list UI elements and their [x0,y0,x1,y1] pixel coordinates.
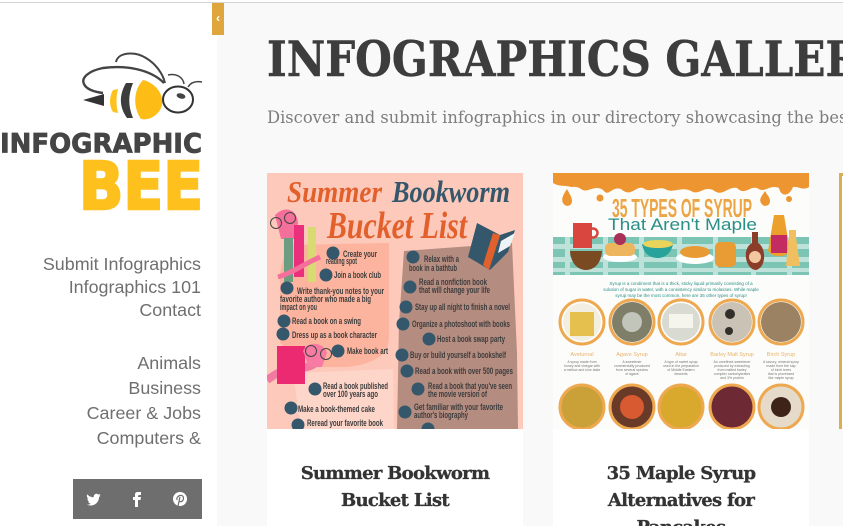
list item text: author's biography [414,410,468,420]
sidebar toggle tab: ‹ [216,11,220,25]
syrup labels: Agave Syrup [616,352,648,358]
list item text: Reread your favorite book [307,418,384,428]
infographic: syrup thumbnail: A savory, mineral syrup [763,360,799,364]
nav: categories: Animals [137,353,201,373]
infographic: syrup thumbnail: and 3% protein [720,376,744,380]
infographic: bookworm thumbnail: Bucket List [326,205,468,247]
list item text: over 100 years ago [323,389,378,399]
list item text: reading spot [326,256,357,266]
list item text: Write thank-you notes to your [297,286,384,296]
list item text: Dress up as a book character [292,330,377,340]
icon: twitter [87,494,100,506]
infographic: syrup thumbnail: used in the preparation [663,364,699,368]
card title [607,463,756,526]
sidebar [0,0,217,526]
logo: Infographic Bee [0,52,203,217]
infographic: syrup thumbnail: desserts [674,372,688,376]
infographic: syrup thumbnail: A type of sweet syrup [664,360,698,364]
infographic: syrup thumbnail [553,173,809,429]
bookshelf and worm [275,209,298,239]
list item text: Read a book published [323,381,388,391]
intro text [603,281,759,298]
intro text: solution of sugar in water, with a consistency similar to molasses. While maple [603,287,759,292]
top border [0,0,843,3]
nav: primary links: Infographics 101 [69,277,201,297]
nav: primary links [43,254,201,320]
nav: categories: Career & Jobs [87,403,201,423]
card: partial third [839,173,843,429]
card: Summer Bookworm Bucket List [267,173,523,526]
infographic: syrup thumbnail: A sweetener [622,360,642,364]
infographic: syrup thumbnail: from several species [616,368,648,372]
social icons bar [73,479,202,519]
icon: facebook [133,492,141,507]
syrup photo circles row 2 [560,385,803,429]
card title [301,463,490,511]
icon: bee [83,53,202,119]
syrup labels [570,352,795,358]
list item text: book in a bathtub [409,263,457,273]
list item text: Make a book-themed cake [298,404,375,414]
list item text: impact on you [280,302,317,312]
syrup labels: Barley Malt Syrup [710,352,754,358]
infographic: syrup thumbnail: A syrup made from [567,360,597,364]
nav: categories [87,353,201,448]
nav: categories: Computers & [97,428,201,448]
page subtitle: Discover and submit infographics in our directory showcasing the best [267,108,843,128]
heading: Summer [287,174,383,209]
infographic: syrup thumbnail: of birch trees [771,368,791,372]
list item text: Create your [343,249,377,259]
icon: pinterest [173,492,187,506]
infographic: syrup thumbnail: made from the sap [766,364,796,368]
nav: categories: Business [128,378,201,398]
syrup photo circles row 1 [560,300,803,344]
open book [468,223,500,270]
list item text: Make book art [347,346,388,356]
syrup labels: Aveturnal [570,352,594,358]
sidebar toggle tab [212,3,224,35]
infographic: syrup thumbnail: complex carbohydrates [714,372,750,376]
list item text: Join a book club [334,270,381,280]
infographic: syrup thumbnail: that is processed [768,372,794,376]
card title: Alternatives for [608,490,754,511]
infographic: syrup thumbnail: from malted barley [718,368,747,372]
infographic: syrup thumbnail: a mellow and nice taste [564,368,600,372]
list item text: Relax with a [424,254,460,264]
intro text: Syrup is a condiment that is a thick, sticky liquid primarily consisting of a [609,281,753,286]
pink book and worm [267,357,319,380]
infographic: syrup thumbnail: of agave [625,372,639,376]
list item text: that will change your life [419,285,490,295]
infographic: bookworm thumbnail [267,173,523,429]
list item text: favorite author who made a big [280,294,371,304]
infographic: syrup thumbnail: like maple syrup [768,376,794,380]
breakfast items [573,223,592,248]
list item text: Read a nonfiction book [419,277,488,287]
infographic: syrup thumbnail: That Aren't Maple [608,215,757,234]
list item text: Read a book on a swing [292,316,361,326]
intro text: syrup may be the most common, here are 35 other types of syrup! [615,293,747,298]
syrup drips [553,173,809,195]
card title: 35 Maple Syrup [607,463,755,484]
syrup labels: Attar [675,352,687,358]
card title: Bucket List [341,490,449,511]
infographic: syrup thumbnail: produced by extracting [714,364,750,368]
list item text [280,249,513,428]
nav: primary links: Contact [139,300,201,320]
list item badges [276,246,436,436]
logo word: INFOGRAPHIC: INFOGRAPHIC [0,128,202,160]
syrup labels: Birch Syrup [767,352,795,358]
nav: primary links: Submit Infographics [43,254,201,274]
infographic: syrup thumbnail: An unrefined sweetener [714,360,751,364]
tablecloth [553,237,809,275]
infographic: syrup thumbnail: honey and vinegar with [564,364,600,368]
infographic: syrup thumbnail: of Middle Eastern [667,368,695,372]
card title: Summer Bookworm [301,463,489,484]
list item text: the movie version of [428,389,488,399]
infographic: syrup thumbnail: commercially produced [614,364,650,368]
card: 35 Maple Syrup Alternatives [553,173,809,526]
